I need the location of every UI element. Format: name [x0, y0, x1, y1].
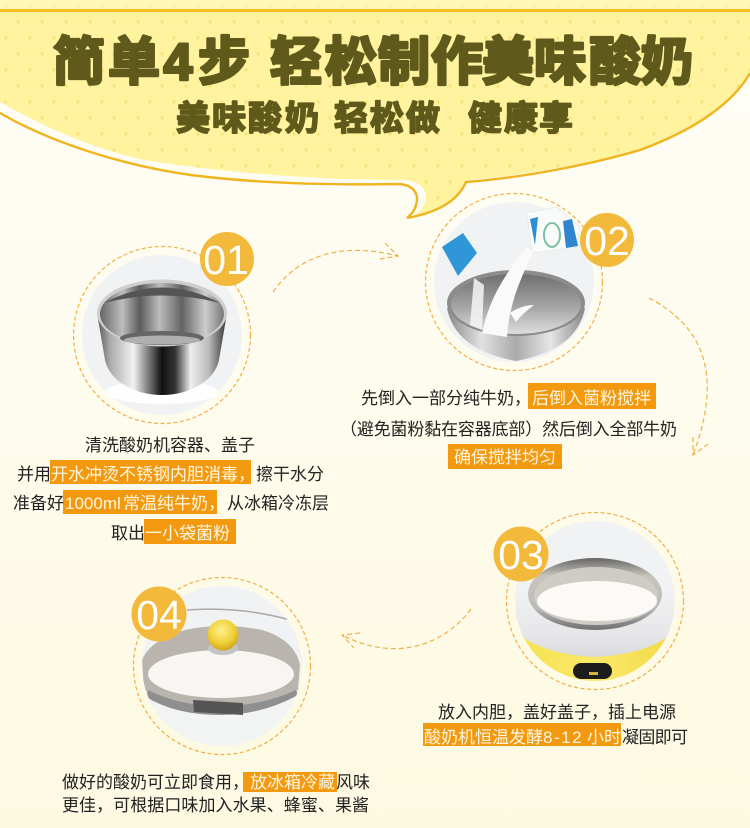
step 04 text: 放冰箱冷藏 [250, 773, 335, 792]
step 04 text [62, 772, 370, 815]
step 04 photo: yogurt maker with glass lid [134, 578, 310, 754]
step 03 text: 放入内胆，盖好盖子，插上电源 [438, 703, 676, 722]
step 02 [340, 194, 677, 469]
step 01 text: 常温纯牛奶， [123, 494, 225, 513]
step 03 text: 凝固即可 [622, 728, 688, 747]
step 01 text: 从冰箱冷冻层 [227, 494, 329, 513]
step 01 text: 取出 [111, 524, 145, 543]
step 01 [13, 232, 329, 544]
step 02 text: 先倒入一部分纯牛奶， [361, 389, 531, 408]
step 03 photo: yogurt maker without lid [506, 512, 684, 690]
arrow: step 3 to 4 [342, 609, 471, 649]
step 03 text [423, 703, 688, 747]
step 02 photo: milk poured into bowl [426, 194, 602, 370]
step 01 text: 清洗酸奶机容器、盖子 [85, 436, 255, 455]
step 02 badge: 02 [584, 218, 630, 264]
step 01 text: 并用 [17, 465, 51, 484]
step 01 text: 准备好 [13, 494, 64, 513]
arrow: step 2 to 3 [649, 298, 708, 455]
step 02 text: （避免菌粉黏在容器底部）然后倒入全部牛奶 [340, 420, 677, 439]
step 02 text [340, 383, 677, 469]
step 04 badge [132, 586, 186, 642]
step 03 badge: 03 [498, 532, 544, 578]
step 03 text: 8-12 [543, 728, 583, 747]
title: 简单4步轻松制作美味酸奶 [53, 34, 693, 92]
step 04 text: 风味 [336, 773, 370, 792]
step 03 [423, 512, 688, 747]
step 04 badge: 04 [136, 592, 182, 638]
step 01 text: 1000ml [65, 494, 121, 513]
step 03 badge [494, 526, 548, 582]
step 04 text: 更佳，可根据口味加入水果、蜂蜜、果酱 [62, 796, 369, 815]
header speech bubble [0, 0, 750, 218]
step 01 badge: 01 [203, 237, 249, 283]
step 04 text: 做好的酸奶可立即食用， [62, 773, 249, 792]
step 01 text: 一小袋菌粉 [145, 524, 230, 543]
step 02 text: 确保搅拌均匀 [454, 448, 556, 467]
step 03 text: 小时 [587, 728, 621, 747]
step 02 text: 后倒入菌粉搅拌 [532, 389, 651, 408]
step 04 [62, 578, 370, 815]
subtitle: 美味酸奶轻松做健康享 [176, 100, 573, 138]
step 01 text [13, 436, 329, 544]
step 01 text: 擦干水分 [256, 465, 324, 484]
arrow: step 1 to 2 [273, 243, 398, 292]
step 01 text: 开水冲烫不锈钢内胆消毒， [51, 465, 255, 484]
step 01 photo: steel pot [74, 246, 250, 424]
step 03 text: 酸奶机恒温发酵 [424, 728, 543, 747]
